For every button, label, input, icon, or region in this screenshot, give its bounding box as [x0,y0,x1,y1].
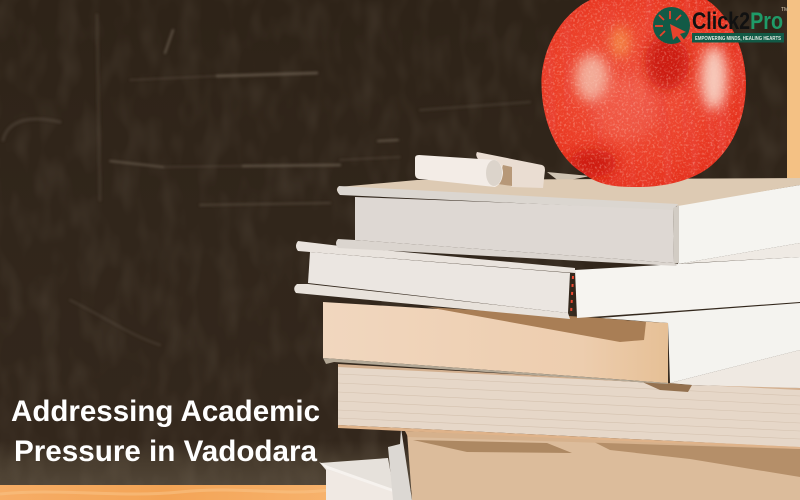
bottom white book [319,458,394,500]
wooden frame: bottom ledge [0,485,330,500]
second white book [294,241,800,319]
logo: Click2Pro [653,7,788,44]
title: Pressure in Vadodara [14,435,317,468]
logo wordmark: Click2Pro [692,8,783,35]
logo tagline: EMPOWERING MINDS, HEALING HEARTS [695,36,782,42]
book stack [294,172,800,500]
red stitching [571,276,573,315]
icon: green circle with cursor [653,7,690,44]
title: Addressing Academic [11,395,320,428]
chalk pieces [415,152,545,188]
grey spine strip [388,428,412,500]
beige book [323,302,800,388]
top grey book [336,172,800,266]
wooden frame: right side [787,0,800,182]
title [11,395,320,468]
red apple [535,0,755,190]
trademark: TM [781,7,788,13]
tan book at base [405,431,800,500]
page-block book [338,364,800,449]
